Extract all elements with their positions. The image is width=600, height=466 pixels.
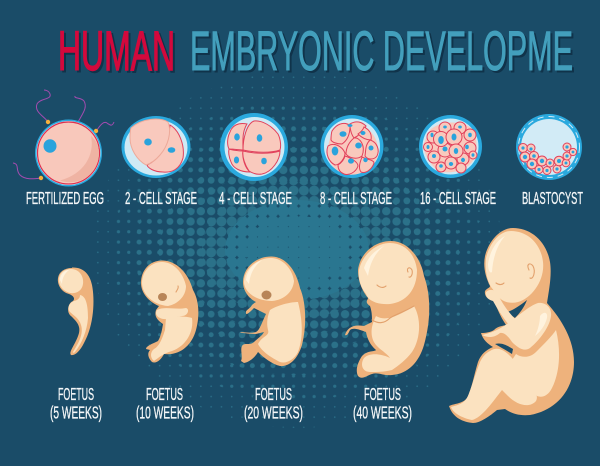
icon: 8-cell zona (320, 115, 384, 178)
foetus: full term (449, 228, 574, 423)
icon: 2-cell blastomeres (130, 119, 183, 172)
torso (512, 330, 559, 397)
label: foetus 10 weeks (136, 384, 194, 422)
label: fertilized egg: FERTILIZED EGG (26, 188, 104, 208)
label: foetus 5 weeks: (5 WEEKS) (50, 402, 102, 422)
head (486, 231, 543, 303)
stage: 4-cell (220, 113, 288, 181)
near arm and hand (482, 303, 551, 350)
thigh and lower leg (451, 349, 537, 420)
label: 4-cell stage: 4 - CELL STAGE (219, 188, 292, 208)
title (58, 19, 575, 84)
far arm and hand (486, 290, 518, 326)
label: foetus 10 weeks: (10 WEEKS) (136, 402, 194, 422)
gaps (507, 300, 527, 318)
icon: 8-cell blastomeres (327, 122, 378, 175)
label: foetus 10 weeks: FOETUS (146, 384, 183, 404)
stage: 8-cell (320, 115, 384, 178)
label: foetus 20 weeks: (20 WEEKS) (244, 402, 303, 422)
stage: fertilized egg (13, 90, 114, 186)
icon: inner cell mass (518, 143, 577, 174)
stage: 2-cell (122, 116, 190, 178)
title: HUMAN (58, 19, 175, 82)
label: foetus 40 weeks (353, 384, 412, 422)
label: 16-cell stage: 16 - CELL STAGE (420, 188, 496, 208)
label: 2-cell stage: 2 - CELL STAGE (125, 188, 197, 208)
label: foetus 40 weeks: (40 WEEKS) (353, 402, 412, 422)
label: foetus 5 weeks: FOETUS (58, 384, 94, 404)
label: foetus 40 weeks: FOETUS (364, 384, 401, 404)
foetus: 20 weeks (240, 256, 305, 366)
icon: egg (35, 120, 102, 186)
label: foetus 5 weeks (50, 384, 102, 422)
icon: 4-cell blastomeres (228, 121, 281, 174)
label: foetus 20 weeks (244, 384, 303, 422)
silhouette (449, 228, 574, 423)
foetus: 40 weeks (345, 241, 429, 378)
label: foetus 20 weeks: FOETUS (255, 384, 292, 404)
icon: blastocyst wall (516, 114, 582, 180)
foetus: 10 weeks (141, 260, 198, 363)
stage: blastocyst (516, 114, 582, 180)
icon: 16-cell blastomeres (424, 122, 477, 173)
stage: 16-cell (419, 115, 482, 178)
icon: 2-cell zona (122, 116, 190, 178)
foetus: 5 weeks (58, 267, 93, 355)
halftone dot background (92, 72, 502, 428)
icon: 16-cell zona (419, 115, 482, 178)
title: HUMAN (60, 21, 177, 84)
icon: sperm cells (13, 90, 114, 180)
label: 8-cell stage: 8 - CELL STAGE (320, 188, 392, 208)
icon: 4-cell zona (220, 113, 288, 181)
